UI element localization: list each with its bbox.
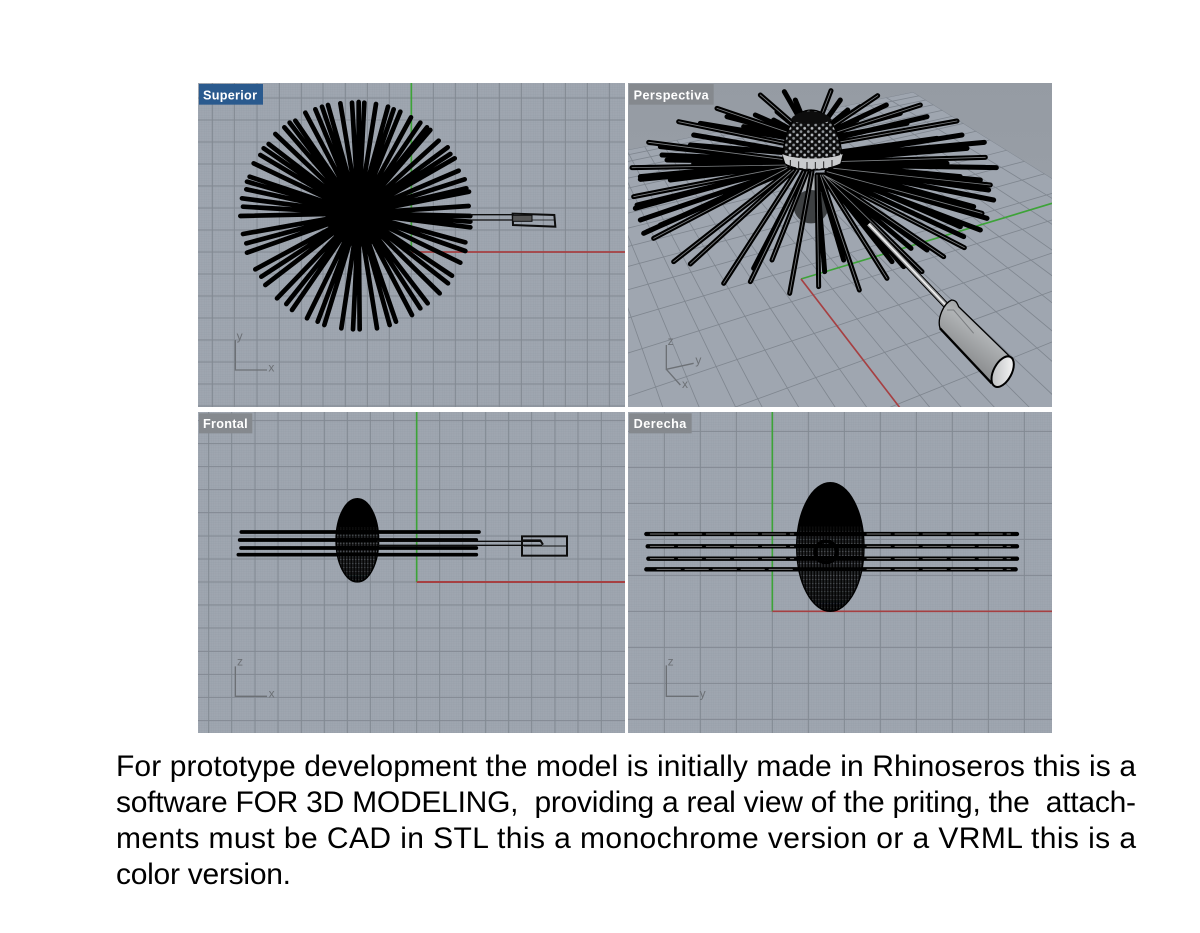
view label: Perspectiva bbox=[629, 84, 714, 105]
axis icon: x bbox=[682, 377, 688, 391]
caption text block: color version. bbox=[116, 858, 291, 891]
radial spokes seen from above bbox=[240, 102, 470, 329]
upper dome lattice bbox=[782, 110, 843, 170]
horizontal rods bbox=[646, 534, 1017, 569]
handle rod and cylinder bbox=[869, 224, 1018, 391]
axis icon: y bbox=[695, 353, 701, 367]
axis icon bbox=[666, 654, 706, 701]
infographic canvas bbox=[116, 83, 1136, 884]
caption text block bbox=[116, 750, 1136, 891]
axis icon: y bbox=[237, 329, 243, 343]
axis icon: y bbox=[700, 687, 706, 701]
radial rods in perspective bbox=[632, 91, 996, 293]
wireframe ellipsoid bbox=[797, 483, 864, 611]
lower dome bbox=[794, 175, 838, 223]
axis icon: z bbox=[237, 654, 243, 668]
axis icon: z bbox=[668, 654, 674, 668]
wireframe ellipsoid bbox=[336, 499, 379, 582]
view label: Perspectiva: Perspectiva bbox=[634, 88, 710, 102]
panel: Frontal view bbox=[198, 412, 625, 733]
perspective grid bbox=[628, 92, 1052, 407]
panel: Superior top view bbox=[198, 83, 625, 407]
view label: Derecha: Derecha bbox=[634, 417, 687, 431]
axis icon: z bbox=[668, 334, 674, 348]
view label: Frontal: Frontal bbox=[203, 417, 248, 431]
view label: Superior bbox=[199, 84, 263, 105]
axis icon: x bbox=[268, 361, 274, 375]
handle seen from above bbox=[470, 214, 555, 227]
axis icon bbox=[666, 334, 701, 391]
handle side view bbox=[377, 536, 567, 556]
axis icon bbox=[235, 329, 274, 375]
panel: Derecha right view bbox=[628, 412, 1052, 733]
view label: Superior: Superior bbox=[203, 88, 257, 102]
inner ring bbox=[815, 541, 837, 563]
caption text block: ments must be CAD in STL this a monochrome version or a VRML this is a bbox=[116, 822, 1136, 855]
axis icon bbox=[235, 654, 275, 701]
view label: Derecha bbox=[629, 413, 692, 433]
caption text block: software FOR 3D MODELING, providing a real view of the priting, the attach- bbox=[116, 786, 1136, 819]
horizontal rods bbox=[238, 532, 479, 555]
panel: Perspectiva view bbox=[628, 83, 1052, 407]
view label: Frontal bbox=[199, 413, 252, 433]
axis icon: x bbox=[269, 687, 275, 701]
axis lines bbox=[801, 203, 1052, 408]
caption text block: For prototype development the model is initially made in Rhinoseros this is a bbox=[116, 750, 1136, 783]
